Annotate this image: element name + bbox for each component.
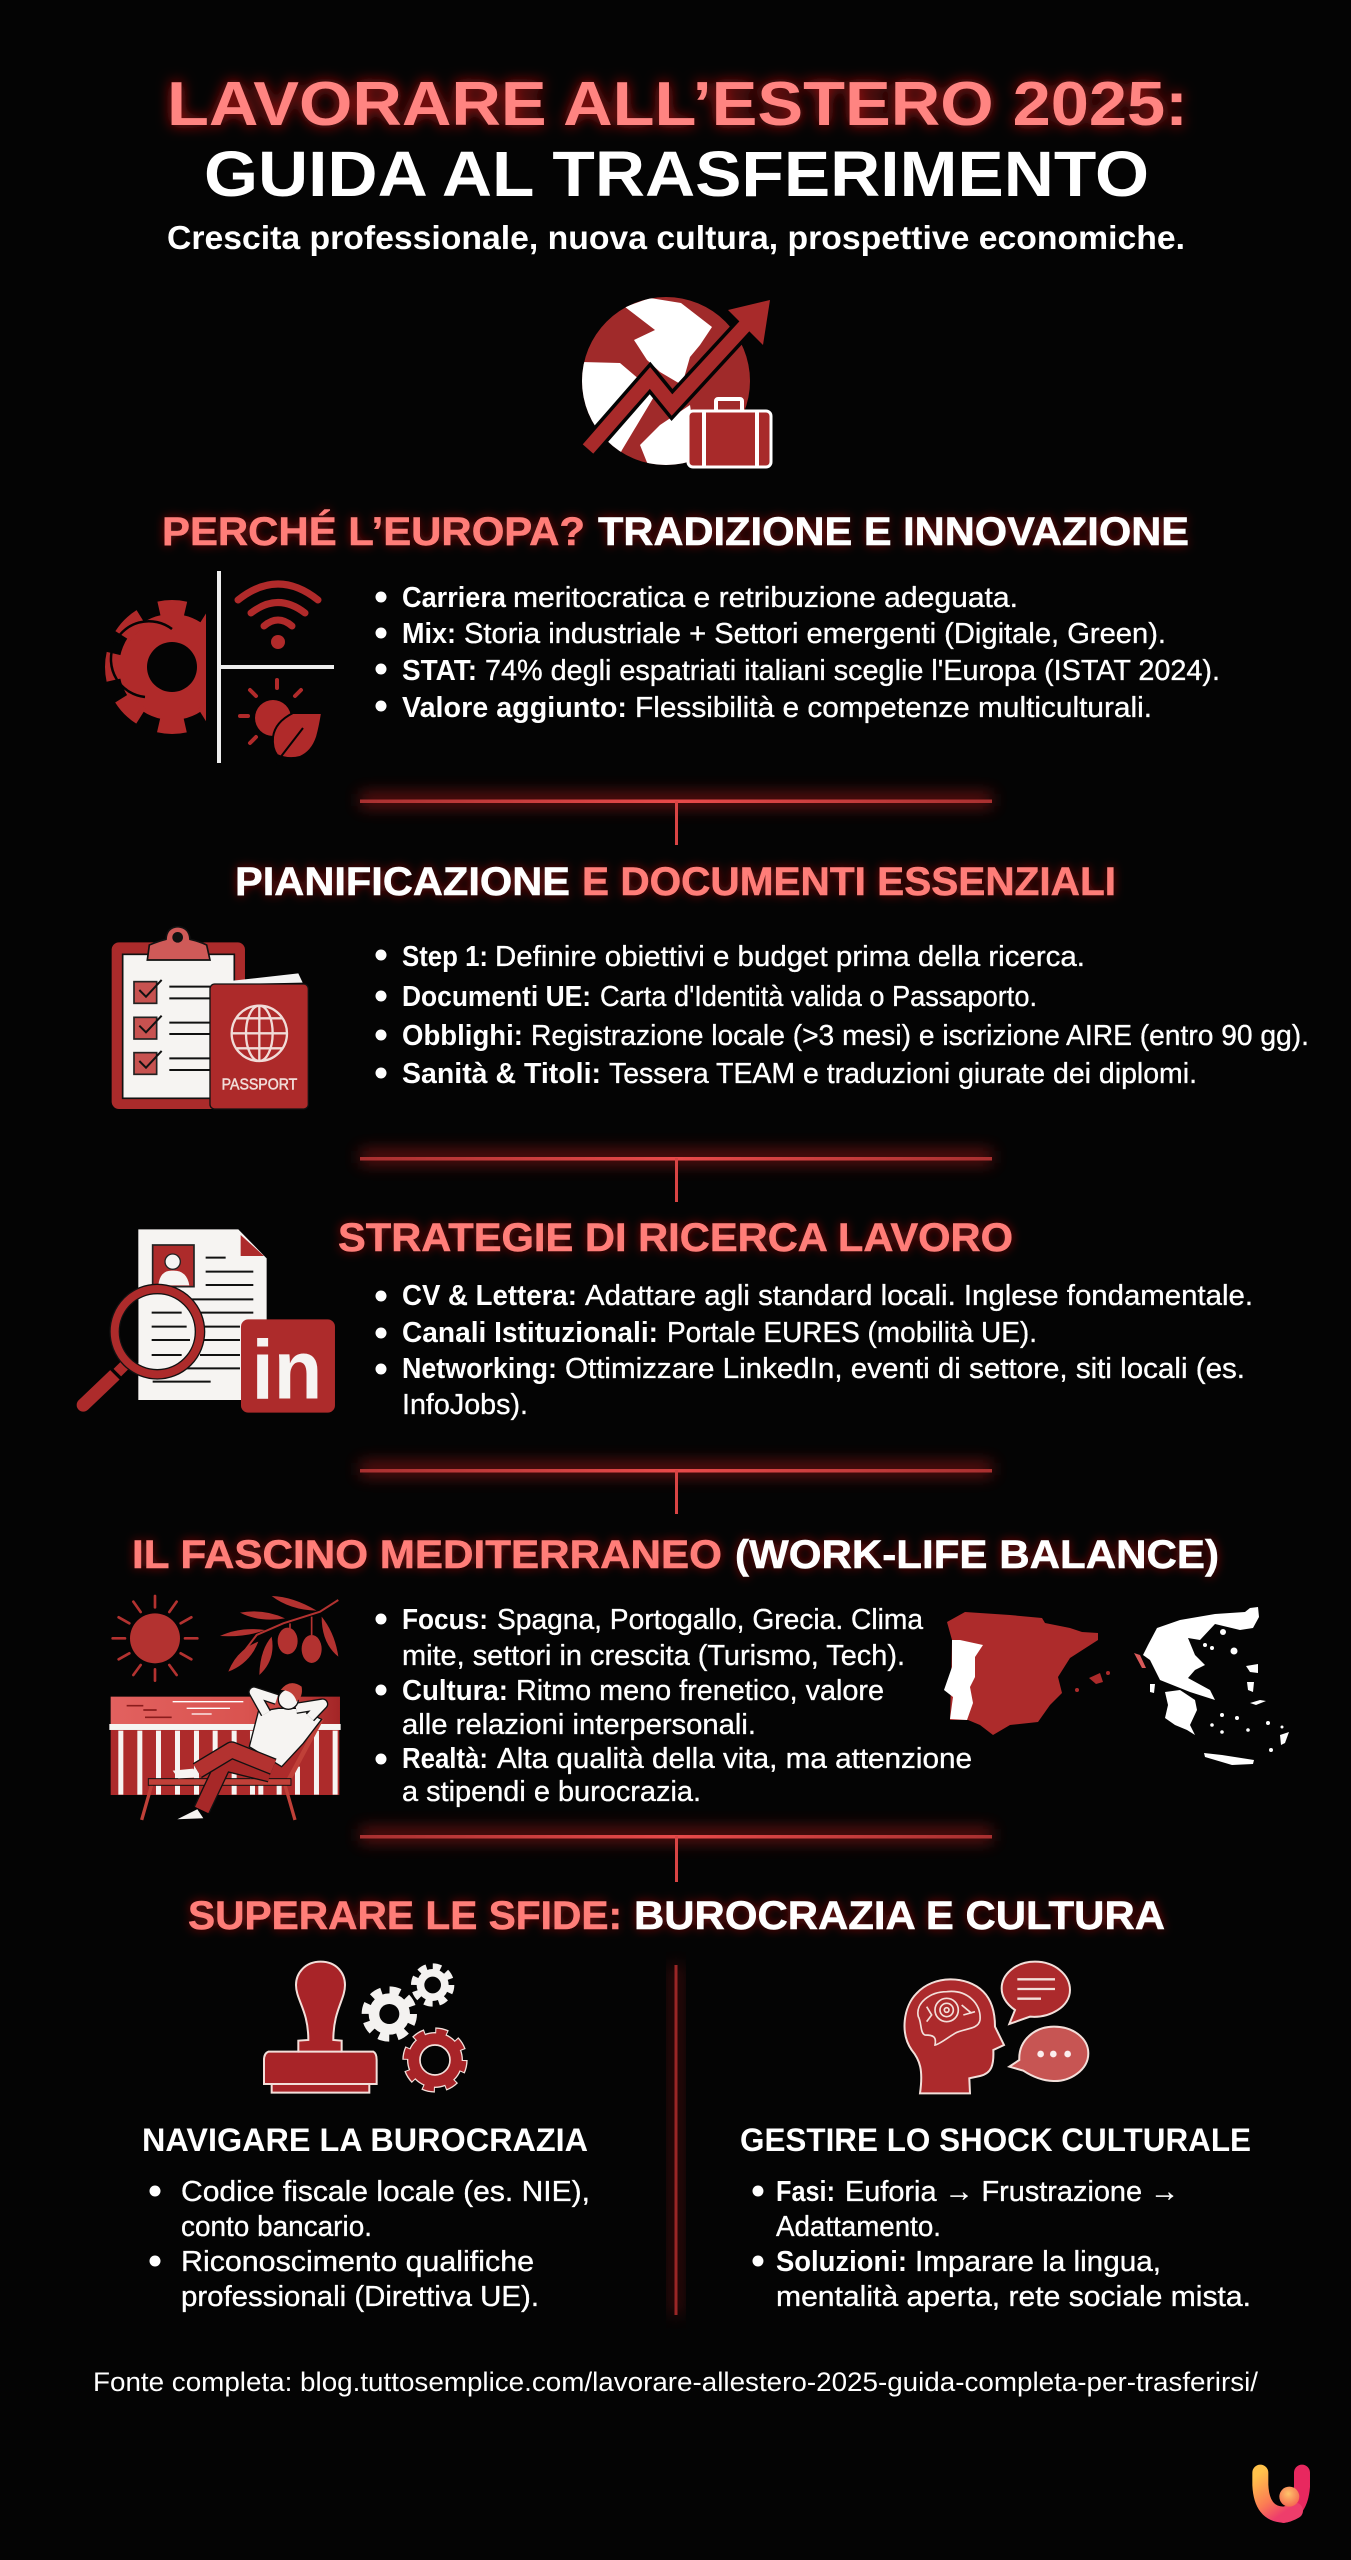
subheading right: GESTIRE LO SHOCK CULTURALE [740,2122,1251,2158]
bullet list [376,582,1220,724]
heading: TRADIZIONE E INNOVAZIONE [598,510,1189,554]
bullet list right: Soluzioni: [776,2246,907,2278]
bullet list: 74% degli espatriati italiani sceglie l'Europa (ISTAT 2024). [485,655,1220,687]
map: Greece [1134,1607,1289,1765]
bullet list: Carriera [402,582,507,614]
icon: stamp and gears [264,1962,463,2093]
panel: il fascino mediterraneo [109,1533,1289,1820]
bullet list: Networking: [402,1353,557,1385]
heading [132,1533,1219,1577]
bullet list: Registrazione locale (>3 mesi) e iscrizione AIRE (entro 90 gg). [531,1020,1309,1052]
bullet list: Ritmo meno frenetico, valore [516,1675,884,1707]
heading: (WORK-LIFE BALANCE) [735,1533,1219,1577]
bullet list: STAT: [402,655,477,687]
heading: PIANIFICAZIONE [235,860,570,904]
bullet list: Spagna, Portogallo, Grecia. Clima [497,1604,924,1636]
heading: STRATEGIE DI RICERCA LAVORO [338,1216,1013,1260]
bullet list: InfoJobs). [402,1389,528,1421]
bullet list: mite, settori in crescita (Turismo, Tech). [402,1640,905,1672]
bullet list: CV & Lettera: [402,1280,577,1312]
panel: pianificazione e documenti [112,860,1309,1109]
panel: strategie di ricerca lavoro [83,1216,1253,1421]
bullet list: Sanità & Titoli: [402,1058,601,1090]
bullet list: Portale EURES (mobilità UE). [667,1317,1037,1349]
bullet list: Focus: [402,1604,488,1636]
bullet list: alle relazioni interpersonali. [402,1709,756,1741]
heading [162,509,1189,554]
panel: perché l'Europa [111,509,1220,763]
bullet list right: Fasi: [776,2176,835,2208]
bullet list: Adattare agli standard locali. Inglese fondamentale. [585,1280,1253,1312]
bullet list left: professionali (Direttiva UE). [181,2281,539,2313]
bullet list: Alta qualità della vita, ma attenzione [497,1743,972,1775]
bullet list: Carta d'Identità valida o Passaporto. [600,981,1037,1013]
bullet list: Canali Istituzionali: [402,1317,658,1349]
divider 4 [360,1828,992,1882]
bullet list [376,1280,1253,1421]
bullet list: Cultura: [402,1675,508,1707]
bullet list left [150,2176,590,2313]
icon: logo [1260,2473,1302,2515]
heading [188,1894,1165,1938]
divider 1 [360,793,992,845]
bullet list left: Riconoscimento qualifiche [181,2246,534,2278]
icon: sun olive branch balcony and relaxing man [109,1596,341,1820]
bullet list [376,941,1309,1090]
bullet list: Storia industriale + Settori emergenti (Digitale, Green). [464,618,1166,650]
subtitle: Crescita professionale, nuova cultura, prospettive economiche. [167,219,1185,256]
bullet list right: mentalità aperta, rete sociale mista. [776,2281,1251,2313]
divider 2 [360,1150,992,1202]
bullet list right: Euforia → Frustrazione → [845,2176,1179,2208]
icon: CV magnifier and LinkedIn [83,1229,335,1416]
bullet list: Mix: [402,618,456,650]
icon: globe with arrow and briefcase [582,297,771,470]
bullet list: Realtà: [402,1743,488,1775]
bullet list: meritocratica e retribuzione adeguata. [513,582,1018,614]
bullet list [376,1604,972,1808]
bullet list: Step 1: [402,941,488,973]
heading: BUROCRAZIA E CULTURA [634,1894,1165,1938]
divider 3 [360,1462,992,1514]
heading: SUPERARE LE SFIDE: [188,1894,622,1938]
bullet list: Ottimizzare LinkedIn, eventi di settore, siti locali (es. [565,1353,1245,1385]
bullet list: Documenti UE: [402,981,591,1013]
heading: IL FASCINO MEDITERRANEO [132,1533,722,1577]
bullet list left: Codice fiscale locale (es. NIE), [181,2176,590,2208]
icon: checklist and passport: PASSPORT [222,1076,298,1093]
title: GUIDA AL TRASFERIMENTO [204,138,1149,210]
panel: superare le sfide [142,1894,1251,2315]
map: Spain and Portugal [944,1612,1110,1735]
central divider [669,1965,683,2315]
title [167,70,1188,210]
bullet list right [752,2176,1251,2313]
subheading left: NAVIGARE LA BUROCRAZIA [142,2122,588,2158]
bullet list: Tessera TEAM e traduzioni giurate dei diplomi. [609,1058,1197,1090]
heading: PERCHÉ L’EUROPA? [162,509,585,554]
source line: Fonte completa: blog.tuttosemplice.com/lavorare-allestero-2025-guida-completa-per-trasferirsi/ [93,2367,1259,2397]
icon: CV magnifier and LinkedIn: in [252,1323,322,1416]
icon: checklist and passport [112,927,308,1109]
bullet list right: Imparare la lingua, [915,2246,1161,2278]
bullet list: Valore aggiunto: [402,692,627,724]
bullet list left: conto bancario. [181,2211,372,2243]
bullet list: Obblighi: [402,1020,523,1052]
icon: head with brain and speech bubbles [905,1962,1088,2093]
heading [235,860,1116,904]
bullet list: Definire obiettivi e budget prima della ricerca. [495,941,1085,973]
icon: gear wifi and sun leaf [111,571,334,763]
bullet list: Flessibilità e competenze multiculturali. [635,692,1152,724]
bullet list right: Adattamento. [776,2211,941,2243]
heading: E DOCUMENTI ESSENZIALI [582,860,1116,904]
bullet list: a stipendi e burocrazia. [402,1776,701,1808]
title: LAVORARE ALL’ESTERO 2025: [167,70,1188,139]
